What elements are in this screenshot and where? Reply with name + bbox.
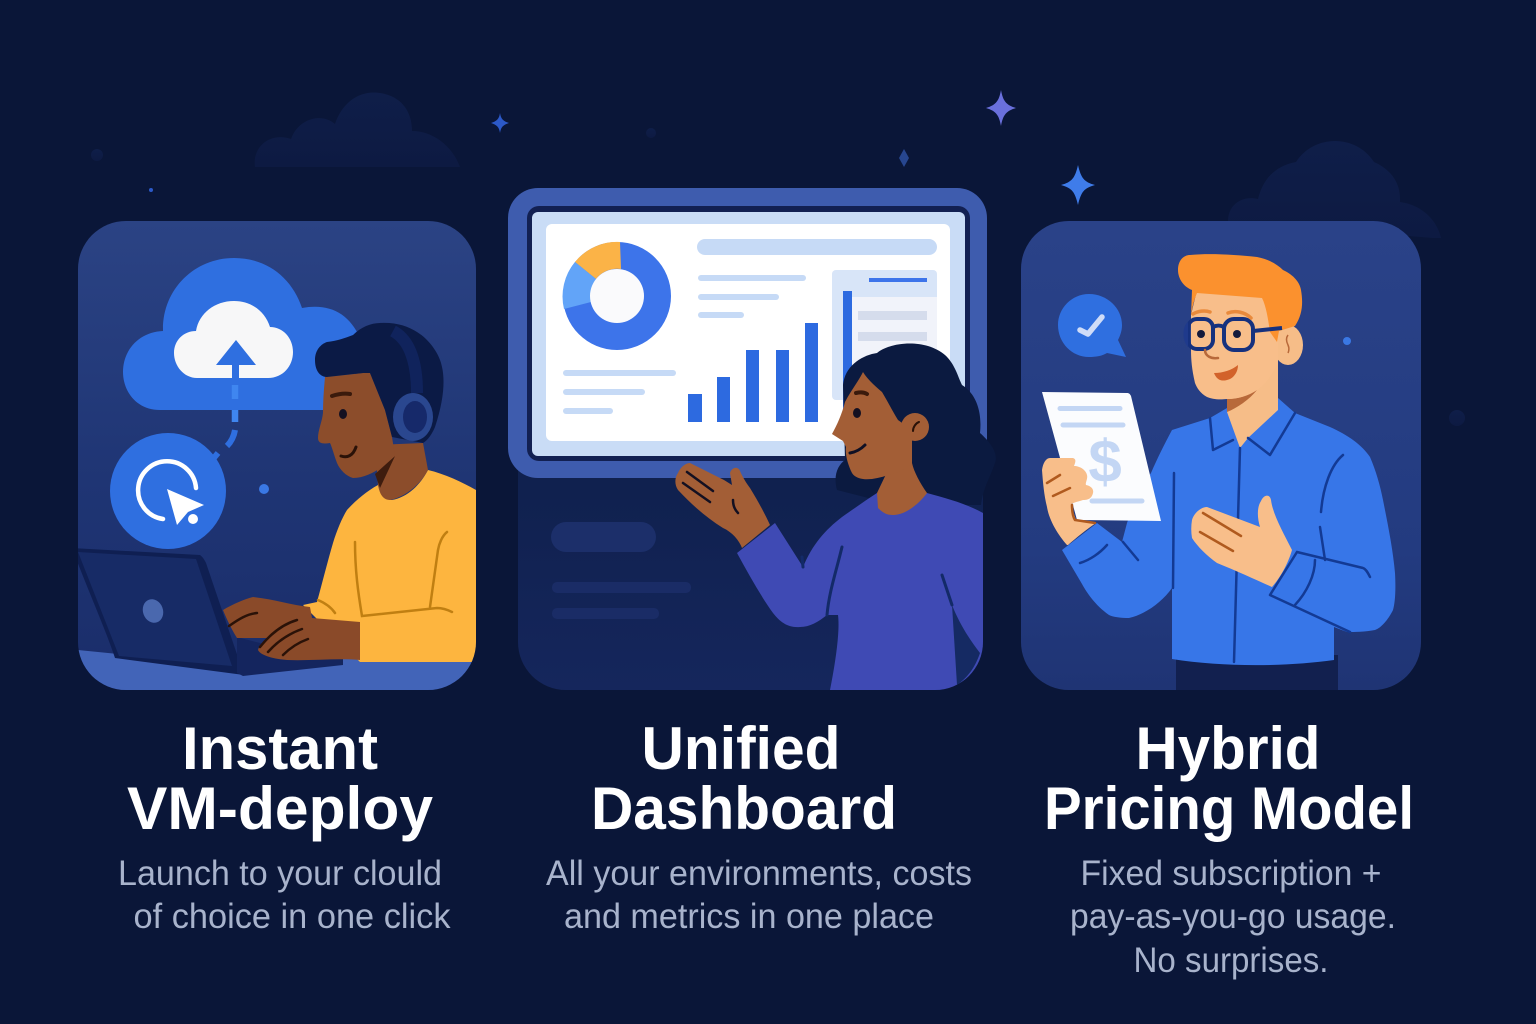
- neck: [877, 445, 927, 515]
- text: hybrid pricing model description: Fixed subscription +: [1080, 854, 1382, 893]
- panel: unified dashboard: [508, 188, 996, 690]
- face: [832, 372, 912, 479]
- glasses: [1188, 319, 1282, 350]
- icon: speech check: [1058, 294, 1126, 357]
- heading: unified dashboard: [591, 715, 897, 842]
- left hand: [1042, 458, 1096, 545]
- sweater: [737, 493, 983, 690]
- panel: hybrid pricing model: [1021, 221, 1421, 691]
- person 2: [675, 343, 996, 690]
- heading: instant VM-deploy: VM-deploy: [127, 775, 434, 842]
- desk: [78, 650, 476, 690]
- icon: invoice: [1042, 392, 1161, 521]
- icon: click button: [110, 433, 226, 549]
- text: instant VM-deploy description: Launch to your clould: [118, 854, 442, 893]
- icon: cloud upload: [123, 258, 360, 459]
- headphones: [393, 331, 417, 393]
- ear: [901, 413, 929, 441]
- heading: hybrid pricing model: Hybrid: [1136, 715, 1320, 782]
- monitor: [508, 188, 987, 478]
- neck: [1227, 360, 1278, 448]
- sweater: [303, 470, 476, 662]
- face: [1191, 290, 1278, 399]
- text: hybrid pricing model description: No surprises.: [1134, 941, 1328, 980]
- hair: [836, 343, 996, 505]
- heading: instant VM-deploy: [127, 715, 434, 842]
- text: unified dashboard description: All your environments, costs: [546, 854, 972, 893]
- side card: [832, 270, 937, 400]
- hand: [675, 463, 770, 548]
- heading: unified dashboard: Unified: [642, 715, 840, 782]
- sparkles: [149, 90, 1095, 205]
- text: unified dashboard description: and metrics in one place: [564, 897, 934, 936]
- text: hybrid pricing model description: [1070, 854, 1396, 980]
- trousers: [1176, 655, 1338, 691]
- hands: [223, 597, 360, 660]
- ear: [1278, 326, 1303, 365]
- hair: [315, 323, 444, 443]
- hair: [1178, 254, 1302, 342]
- right hand: [1191, 496, 1292, 587]
- person 1: [303, 323, 476, 662]
- bar chart: [688, 291, 852, 422]
- infographic: [78, 90, 1465, 980]
- icon: laptop: [72, 548, 343, 676]
- background clouds and dots: [91, 92, 1465, 426]
- text lines: [563, 239, 937, 414]
- text: instant VM-deploy description: [118, 854, 451, 936]
- heading: hybrid pricing model: Pricing Model: [1044, 775, 1414, 842]
- person 3: [1042, 254, 1395, 691]
- neck: [375, 443, 428, 500]
- text: unified dashboard description: [546, 854, 972, 936]
- face: [318, 373, 395, 478]
- icon: invoice: $: [1088, 428, 1122, 495]
- donut chart: [563, 242, 671, 350]
- heading: hybrid pricing model: [1044, 715, 1414, 842]
- placeholder lines: [551, 522, 691, 619]
- shirt lines: [1080, 413, 1370, 662]
- text: hybrid pricing model description: pay-as-you-go usage.: [1070, 897, 1396, 936]
- heading: instant VM-deploy: Instant: [182, 715, 378, 782]
- text: instant VM-deploy description: of choice in one click: [134, 897, 451, 936]
- heading: unified dashboard: Dashboard: [591, 775, 897, 842]
- shirt: [1062, 398, 1395, 665]
- panel: instant VM-deploy: [72, 221, 476, 690]
